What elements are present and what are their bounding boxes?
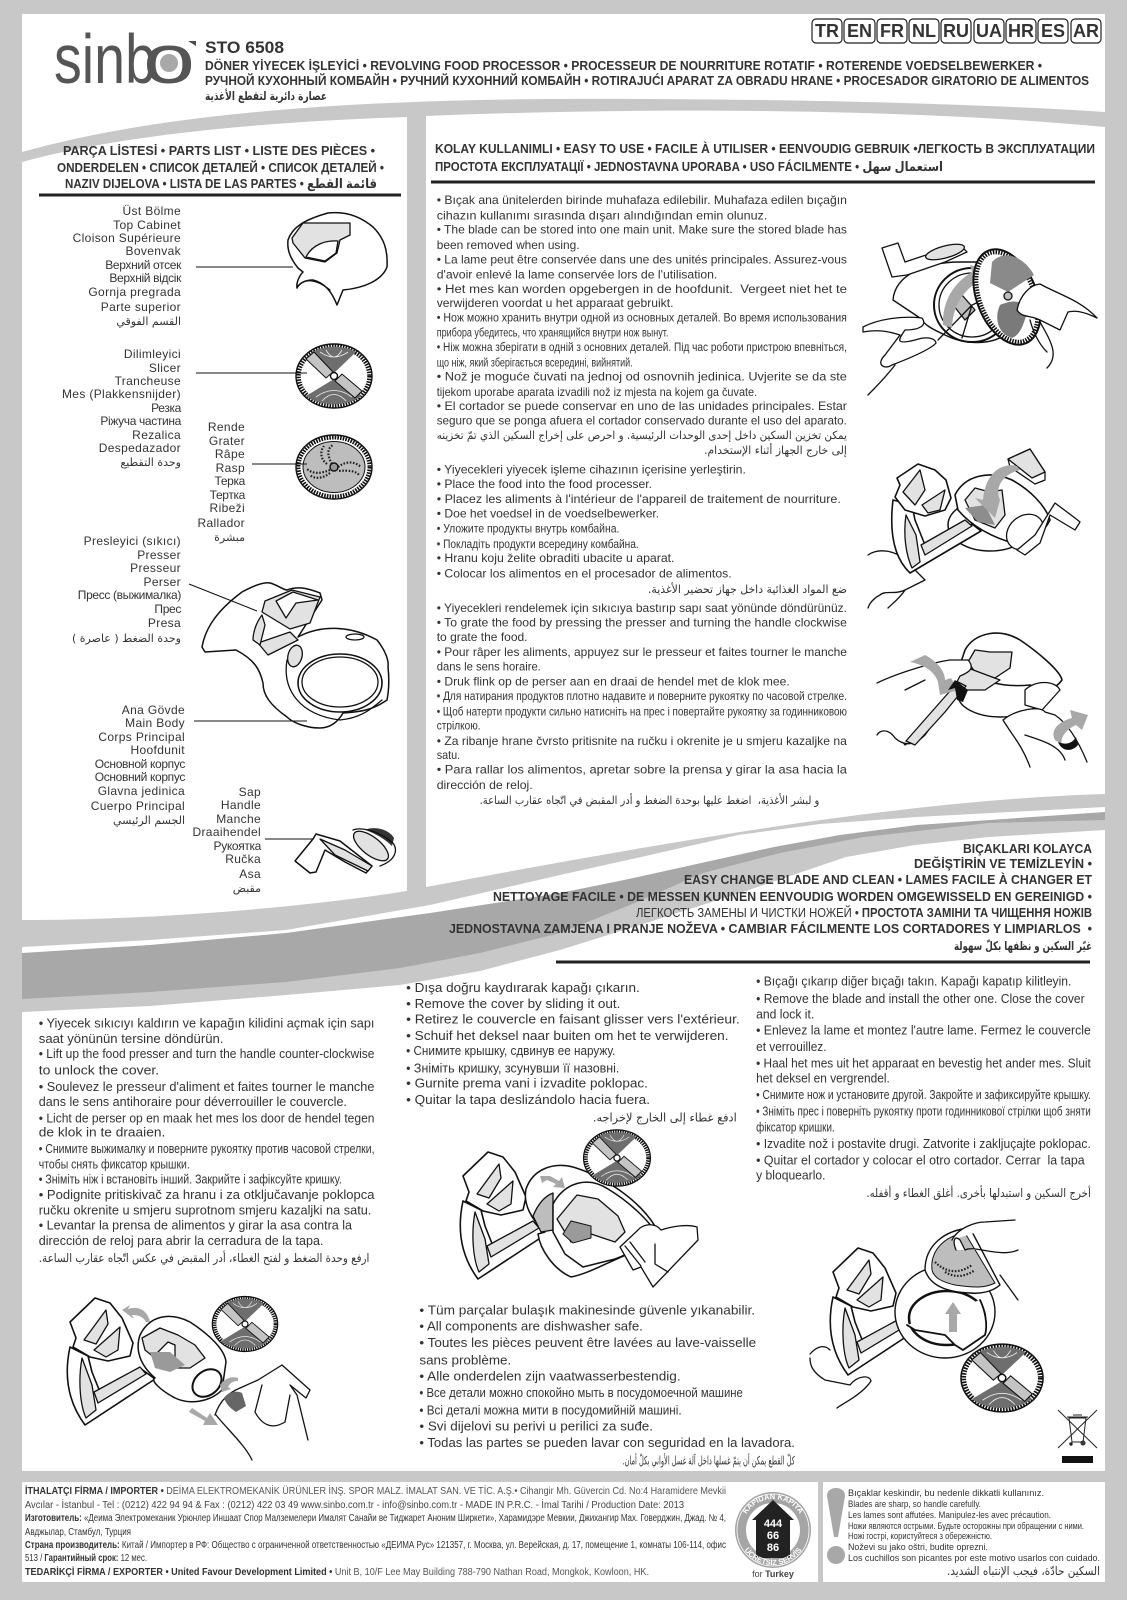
- text block: unlocking cover: ارفع وحدة الضغط و لفتح الغطاء، أدر المقبض في عكس اتّجاه عقارب الساعة.: [39, 1250, 369, 1266]
- label: grater: Ribeži: [210, 501, 245, 515]
- text block: unlocking cover: • Lift up the food presser and turn the handle counter-clockwise: [39, 1046, 374, 1061]
- text block: easy to use instructions: satu.: [437, 748, 460, 762]
- label: handle: Asa: [239, 867, 261, 881]
- text block: importer and exporter details: Изготовитель: «Деима Электромеканик Урюнлер Иншаат Спор Малземелери Ималят Санайи ве Тиджарет Аноним Ширкети», Харамидэре Мевкии, Джихангир Мах. Говерджин, Джад. № 4,: [25, 1513, 726, 1524]
- label: grater: Rende: [208, 420, 245, 434]
- text block: easy to use instructions: been removed when using.: [437, 238, 580, 252]
- text block: easy to use instructions: • Nož je moguće čuvati na jednoj od osnovnih jedinica. Uvjerite se da ste: [437, 370, 847, 384]
- text block: swap blade: het deksel en vergrendel.: [756, 1071, 890, 1086]
- panel: importer footer: [22, 1482, 818, 1582]
- illustration: unlocking and removing handle: [67, 1296, 310, 1460]
- text block: swap blade: • Enlevez la lame et montez l'autre lame. Fermez le couvercle: [756, 1023, 1091, 1038]
- label: grater: Rallador: [198, 516, 245, 530]
- text block: easy to use instructions: • Yiyecekleri rendelemek için sıkıcıya bastırıp sapı saat yönünde döndürünüz.: [437, 601, 847, 615]
- text block: easy to use instructions: • To grate the food by pressing the presser and turning the handle clockwise: [437, 616, 847, 630]
- illustration: installing the other blade: [810, 1220, 1043, 1412]
- illustration: sliding cover off: [460, 1130, 698, 1287]
- badge: free service: 444: [764, 1518, 783, 1530]
- text block: easy to use instructions: to grate the food.: [437, 630, 528, 644]
- text block: easy to use instructions: إلى خارج الجهاز أثناء الإستخدام.: [704, 443, 847, 457]
- label: top cabinet: [73, 204, 182, 328]
- label: main body: Glavna jedinica: [98, 784, 185, 798]
- label: top cabinet: Top Cabinet: [113, 218, 181, 232]
- text block: remove cover: • Retirez le couvercle en faisant glisser vers l'extérieur.: [406, 1011, 740, 1026]
- text block: unlocking cover: • Levantar la prensa de alimentos y girar la asa contra la: [39, 1218, 353, 1233]
- text block: remove cover: • Снимите крышку, сдвинув ее наружу.: [406, 1043, 615, 1058]
- illustration: main body with presser: [189, 583, 389, 728]
- text block: swap blade: • Haal het mes uit het apparaat en bevestig het ander mes. Sluit: [756, 1055, 1091, 1070]
- text block: unlocking cover: saat yönünün tersine döndürün.: [39, 1031, 223, 1046]
- text block: swap blade: et verrouillez.: [756, 1039, 827, 1054]
- text block: easy to use instructions: • Для натирания продуктов плотно надавите и поверните рукоятку по часовой стрелке.: [437, 689, 847, 703]
- language selector boxes: AR: [1073, 21, 1099, 41]
- text block: dishwasher safe: • Svi dijelovi su perivi u perilici za suđe.: [419, 1419, 653, 1434]
- label: presser: Presser: [137, 548, 181, 562]
- label: presser: Presleyici (sıkıcı): [84, 534, 181, 548]
- label: slicer: Despedazador: [99, 441, 181, 455]
- text block: sharp blades warning: Los cuchillos son picantes por este motivo usarlos con cuidado.: [848, 1553, 1100, 1564]
- label: presser: Presseur: [130, 561, 181, 575]
- illustration: pressing and turning: [877, 633, 1088, 767]
- panel: header: [22, 14, 1105, 152]
- text block: easy to use instructions: و لبشر الأغذية، اضغط عليها بوحدة الضغط و أدر المقبض في اتّجاه عقارب الساعة.: [480, 793, 819, 808]
- text block: swap blade: • Quitar el cortador y colocar el otro cortador. Cerrar la tapa: [756, 1152, 1086, 1167]
- text block: dishwasher safe: • Tüm parçalar bulaşık makinesinde güvenle yıkanabilir.: [419, 1302, 755, 1317]
- text block: easy to use instructions: • Colocar los alimentos en el procesador de alimentos.: [437, 567, 732, 581]
- text block: remove cover: • Dışa doğru kaydırarak kapağı çıkarın.: [406, 980, 640, 995]
- text block: easy to use instructions: verwijderen voordat u het apparaat gebruikt.: [437, 296, 673, 310]
- text block: swap blade: • Bıçağı çıkarıp diğer bıçağı takın. Kapağı kapatıp kilitleyin.: [756, 974, 1071, 989]
- label: handle: Draaihendel: [192, 825, 261, 839]
- panel: warning footer: [823, 1482, 1105, 1582]
- icon: exclamation mark: [827, 1488, 845, 1564]
- label: grater: [198, 420, 246, 544]
- text block: easy to use instructions: • Hranu koju želite obraditi ubacite u aparat.: [437, 551, 674, 565]
- title lines: [205, 58, 1089, 103]
- text block: remove cover: • Schuif het deksel naar buiten om het te verwijderen.: [406, 1028, 729, 1043]
- label: main body: Main Body: [125, 716, 185, 730]
- text block: easy to use instructions: ضع المواد الغذائية داخل جهاز تحضير الأغذية.: [648, 582, 847, 596]
- label: grater: Терка: [215, 474, 246, 488]
- text block: sharp blades warning: Noževi su jako oštri, budite oprezni.: [848, 1542, 988, 1553]
- text block: easy to use instructions: прибора убедитесь, что хранящийся внутри нож вынут.: [437, 326, 668, 340]
- icon: crossed-out bin: [1058, 1410, 1097, 1448]
- title lines: عصارة دائرية لتقطع الأغذية: [205, 88, 327, 103]
- label: grater: Rasp: [216, 461, 245, 475]
- heading: easy change blade and clean: NETTOYAGE FACILE • DE MESSEN KUNNEN EENVOUDIG WORDEN OMGEWISSELD EN GEREINIGD •: [493, 889, 1092, 904]
- text block: unlocking cover: чтобы снять фиксатор крышки.: [39, 1156, 190, 1171]
- panel: easy to use: [426, 111, 1105, 887]
- text block: unlocking cover: [39, 1016, 375, 1266]
- heading: easy to use: [431, 141, 1095, 184]
- language selector boxes: HR: [1008, 21, 1034, 41]
- text block: swap blade: фіксатор кришки.: [756, 1120, 835, 1135]
- dark swoosh band: [22, 812, 1105, 999]
- text block: easy to use instructions: • Покладіть продукти всередину комбайна.: [437, 537, 639, 551]
- text block: easy to use instructions: • Уложите продукты внутрь комбайна.: [437, 522, 619, 536]
- text block: easy to use instructions: d'avoir enlevé la lame conservée lors de l'utilisation.: [437, 268, 717, 282]
- text block: unlocking cover: • Soulevez le presseur d'aliment et faites tourner le manche: [39, 1079, 374, 1094]
- text block: remove cover: ادفع غطاء إلى الخارج لإخراجه.: [593, 1110, 737, 1125]
- label: main body: Cuerpo Principal: [91, 799, 185, 813]
- heading: easy change blade and clean: ЛЕГКОСТЬ ЗАМЕНЫ И ЧИСТКИ НОЖЕЙ • ПРОСТОТА ЗАМІНИ ТА ЧИЩЕННЯ НОЖІВ: [636, 905, 1092, 920]
- label: slicer: Slicer: [149, 361, 181, 375]
- label: top cabinet: Üst Bölme: [122, 204, 181, 218]
- text block: sharp blades warning: Les lames sont affutées. Manipulez-les avec précaution.: [848, 1510, 1051, 1521]
- label: slicer: Dilimleyici: [124, 347, 181, 361]
- label: slicer: Резка: [151, 401, 182, 415]
- badge: free service: ÜCRETSİZ SERVİS: [745, 1547, 801, 1566]
- badge: free service: [735, 1492, 811, 1579]
- label: presser: Пресс (выжималка): [78, 588, 181, 602]
- heading: easy to use: ПРОСТОТА ЕКСПЛУАТАЦІЇ • JEDNOSTAVNA UPORABA • USO FÁCILMENTE • استعمال سهل: [435, 159, 943, 174]
- panel: blade change and clean: [22, 830, 1105, 1471]
- badge: free service: KAPIDAN KAPIYA: [742, 1494, 802, 1514]
- language selector boxes: UA: [976, 21, 1002, 41]
- model number: STO 6508: [205, 38, 284, 57]
- label: main body: Основний корпус: [95, 770, 185, 784]
- text block: importer and exporter details: 513 / Гарантийный срок: 12 мес.: [25, 1553, 147, 1564]
- text block: easy to use instructions: • Placez les aliments à l'intérieur de l'appareil de traitement de nourriture.: [437, 492, 841, 506]
- badge: free service: 66: [767, 1530, 779, 1542]
- heading: easy change blade and clean: DEĞİŞTİRİN VE TEMİZLEYİN •: [914, 856, 1092, 871]
- text block: swap blade: أخرج السكين و استبدلها بأخرى. أغلق الغطاء و أقفله.: [866, 1185, 1091, 1201]
- label: presser: Presa: [148, 616, 181, 630]
- text block: remove cover: • Gurnite prema vani i izvadite poklopac.: [406, 1076, 648, 1091]
- text block: easy to use instructions: • Yiyecekleri yiyecek işleme cihazının içerisine yerleştirin.: [437, 462, 746, 476]
- label: main body: Corps Principal: [98, 730, 185, 744]
- text block: swap blade: • Remove the blade and install the other one. Close the cover: [756, 991, 1085, 1006]
- illustration: top cabinet: [196, 213, 387, 305]
- label: top cabinet: Верхній відсік: [109, 271, 182, 285]
- badge: free service: for Turkey: [752, 1569, 794, 1579]
- label: main body: Ana Gövde: [122, 703, 185, 717]
- text block: easy to use instructions: seguro que se ponga afuera el cortador conservado durante el uso del aparato.: [437, 413, 847, 427]
- text block: easy to use instructions: dans le sens horaire.: [437, 659, 541, 673]
- text block: dishwasher safe: • Todas las partes se pueden lavar con seguridad en la lavadora.: [419, 1435, 795, 1450]
- label: handle: Рукоятка: [214, 839, 262, 853]
- text block: easy to use instructions: • Za ribanje hrane čvrsto pritisnite na ručku i okrenite je u smjeru kazaljke na: [437, 734, 847, 748]
- text block: remove cover: • Quitar la tapa deslizándolo hacia fuera.: [406, 1092, 650, 1107]
- heading: parts list: PARÇA LİSTESİ • PARTS LIST • LISTE DES PIÈCES •: [63, 143, 375, 158]
- label: top cabinet: Cloison Supérieure: [73, 231, 181, 245]
- label: grater: Râpe: [215, 447, 245, 461]
- illustration: grater disc: [252, 435, 372, 499]
- text block: unlocking cover: dans le sens antihoraire pour déverrouiller le couvercle.: [39, 1094, 347, 1109]
- heading: easy change blade and clean: EASY CHANGE BLADE AND CLEAN • LAMES FACILE À CHANGER ET: [684, 872, 1092, 887]
- text block: swap blade: y bloquearlo.: [756, 1168, 826, 1183]
- text block: swap blade: and lock it.: [756, 1006, 814, 1021]
- heading: easy change blade and clean: [449, 841, 1093, 964]
- label: handle: Ručka: [225, 852, 261, 866]
- text block: easy to use instructions: • El cortador se puede conservar en uno de las unidades principales. Estar: [437, 399, 847, 413]
- label: handle: Sap: [239, 785, 261, 799]
- text block: importer and exporter details: [25, 1484, 726, 1578]
- label: slicer: وحدة التقطيع: [120, 456, 181, 469]
- illustration: fitting the disc: [863, 239, 1097, 395]
- text block: unlocking cover: • Зніміть ніж і встановіть інший. Закрийте і зафіксуйте кришку.: [39, 1172, 342, 1187]
- text block: remove cover: • Remove the cover by sliding it out.: [406, 996, 620, 1011]
- label: grater: Тертка: [210, 488, 246, 502]
- text block: easy to use instructions: • Het mes kan worden opgebergen in de hoofdunit. Vergeet niet het te: [437, 282, 847, 296]
- panel: white sliver: [22, 807, 1105, 954]
- black bar under bin icon: [1062, 1456, 1093, 1463]
- text block: dishwasher safe: كلّ القطع يمكن أن يتمّ غسلها داخل آلة غسل الأواني بكلّ أمان.: [622, 1452, 795, 1468]
- title lines: DÖNER YİYECEK İŞLEYİCİ • REVOLVING FOOD PROCESSOR • PROCESSEUR DE NOURRITURE ROTATIF • ROTERENDE VOEDSELBEWERKER •: [205, 58, 1042, 73]
- text block: sharp blades warning: Bıçaklar keskindir, bu nedenle dikkatli kullanınız.: [848, 1488, 1044, 1499]
- heading: parts list: [39, 143, 401, 196]
- label: main body: [91, 703, 185, 827]
- panel: parts list: [22, 117, 407, 920]
- label: presser: Прес: [154, 602, 181, 616]
- heading: parts list: NAZIV DIJELOVA • LISTA DE LAS PARTES • قائمة القطع: [65, 176, 377, 191]
- logo: sinbo: sinb: [54, 20, 156, 98]
- text block: easy to use instructions: • La lame peut être conservée dans une des unités principales. Assurez-vous: [437, 252, 847, 266]
- text block: importer and exporter details: İTHALATÇI FİRMA / IMPORTER • DEİMA ELEKTROMEKANİK ÜRÜNLER İNŞ. SPOR MALZ. İMALAT SAN. VE TİC. A.Ş.• Cihangir Mh. Güvercin Cd. No:4 Haramidere Mevkii: [25, 1484, 726, 1497]
- text block: dishwasher safe: [419, 1302, 795, 1468]
- text block: unlocking cover: • Podignite pritiskivač za hranu i za otključavanje poklopca: [39, 1187, 375, 1202]
- label: handle: [192, 785, 262, 895]
- heading: easy change blade and clean: BIÇAKLARI KOLAYCA: [963, 841, 1093, 856]
- text block: swap blade: • Izvadite nož i postavite drugi. Zatvorite i zakljuçajte poklopac.: [756, 1136, 1091, 1151]
- text block: dishwasher safe: • All components are dishwasher safe.: [419, 1319, 643, 1334]
- text block: unlocking cover: ručku okrenite u smjeru suprotnom smjeru kazaljki na satu.: [39, 1202, 371, 1217]
- logo: sinbo: o: [143, 20, 195, 98]
- text block: importer and exporter details: Авджылар, Стамбул, Турция: [25, 1526, 131, 1538]
- text block: easy to use instructions: cihazın kullanımı sırasında dışarı alındığından emin olunuz.: [437, 208, 767, 222]
- text block: importer and exporter details: Страна производитель: Китай / Импортер в РФ: Общество с ограниченной ответственностью «ДЕИМА Рус» 121357, г. Москва, ул. Верейская, д. 17, помещение 1, комнаты 106-114, офис: [25, 1539, 726, 1551]
- heading: parts list: ONDERDELEN • СПИСОК ДЕТАЛЕЙ • СПИСОК ДЕТАЛЕЙ •: [57, 160, 384, 175]
- heading: easy to use: KOLAY KULLANIMLI • EASY TO USE • FACILE À UTILISER • EENVOUDIG GEBRUIK •ЛЕГКОСТЬ В ЭКСПЛУАТАЦИИ: [435, 141, 1095, 156]
- text block: remove cover: [406, 980, 740, 1125]
- label: top cabinet: Bovenvak: [126, 244, 182, 258]
- text block: dishwasher safe: • Всі деталі можна мити в посудомийній машині.: [419, 1402, 682, 1417]
- label: top cabinet: Gornja pregrada: [88, 285, 181, 299]
- text block: easy to use instructions: • Bıçak ana ünitelerden birinde muhafaza edilebilir. Muhafaza edilen bıçağın: [437, 193, 847, 207]
- text block: unlocking cover: • Yiyecek sıkıcıyı kaldırın ve kapağın kilidini açmak için sapı: [39, 1016, 374, 1031]
- text block: dishwasher safe: sans problème.: [419, 1352, 511, 1367]
- language selector boxes: TR: [815, 21, 839, 41]
- text block: easy to use instructions: dirección de reloj.: [437, 778, 533, 792]
- text block: easy to use instructions: що ніж, який зберігається всередині, вийнятий.: [437, 355, 633, 369]
- text block: sharp blades warning: السكين حادّة، فيجب الإنتباه الشديد.: [947, 1564, 1100, 1579]
- badge: free service: 86: [767, 1542, 779, 1554]
- label: handle: مقبض: [233, 882, 261, 895]
- illustration: slicer disc: [196, 344, 372, 408]
- label: slicer: Rezalica: [132, 428, 181, 442]
- label: slicer: [62, 347, 182, 469]
- text block: easy to use instructions: • Ніж можна зберігати в одній з основних деталей. Під час роботи пристрою впевніться,: [437, 340, 847, 354]
- text block: sharp blades warning: Ножі гострі, користуйтеся з обережністю.: [848, 1531, 992, 1542]
- label: grater: Grater: [209, 434, 245, 448]
- text block: unlocking cover: dirección de reloj para abrir la cerradura de la tapa.: [39, 1233, 323, 1248]
- text block: easy to use instructions: [437, 193, 847, 808]
- text block: easy to use instructions: стрілкою.: [437, 719, 481, 733]
- text block: unlocking cover: to unlock the cover.: [39, 1062, 159, 1077]
- text block: importer and exporter details: Avcılar - İstanbul - Tel : (0212) 422 94 94 & Fax : (0212) 422 03 49 www.sinbo.com.tr - info@sinbo.com.tr - MADE IN P.R.C. - İmal Tarihi / Production Date: 2013: [25, 1498, 684, 1511]
- label: main body: Hoofdunit: [130, 743, 185, 757]
- label: top cabinet: Верхний отсек: [105, 258, 182, 272]
- text block: easy to use instructions: • Place the food into the food processer.: [437, 477, 652, 491]
- heading: easy change blade and clean: JEDNOSTAVNA ZAMJENA I PRANJE NOŽEVA • CAMBIAR FÁCILMENTE LOS CORTADORES Y LIMPIARLOS •: [449, 921, 1092, 936]
- text block: dishwasher safe: • Alle onderdelen zijn vaatwasserbestendig.: [419, 1369, 681, 1384]
- text block: dishwasher safe: • Toutes les pièces peuvent être lavées au lave-vaisselle: [419, 1335, 756, 1350]
- label: grater: مبشرة: [214, 531, 245, 544]
- language selector boxes: NL: [912, 21, 936, 41]
- text block: easy to use instructions: • Щоб натерти продукти сильно натисніть на прес і повертайте рукоятку за годинниковою: [437, 704, 847, 718]
- label: main body: الجسم الرئيسي: [113, 814, 185, 827]
- text block: remove cover: • Зніміть кришку, зсунувши її назовні.: [406, 1060, 619, 1075]
- language selector boxes: EN: [847, 21, 872, 41]
- language selector boxes: [812, 19, 1101, 43]
- text block: easy to use instructions: يمكن تخزين السكين داخل إحدى الوحدات الرئيسية. و احرص على إخراج السكين الذي تمّ تخزينه: [437, 429, 847, 443]
- text block: easy to use instructions: tijekom uporabe aparata izvadili nož iz mjesta na kojem ga čuvate.: [437, 385, 757, 399]
- label: handle: Manche: [216, 812, 261, 826]
- label: presser: وحدة الضغط ( عاصرة ): [72, 632, 181, 645]
- language selector boxes: ES: [1041, 21, 1065, 41]
- label: handle: Handle: [221, 798, 261, 812]
- label: slicer: Mes (Plakkensnijder): [62, 387, 181, 401]
- label: slicer: Ріжуча частина: [100, 414, 182, 428]
- text block: sharp blades warning: Blades are sharp, so handle carefully.: [848, 1499, 981, 1510]
- text block: unlocking cover: • Снимите выжималку и поверните рукоятку против часовой стрелки,: [39, 1141, 374, 1156]
- label: presser: Perser: [144, 575, 181, 589]
- language selector boxes: FR: [880, 21, 904, 41]
- illustration: placing food: [868, 449, 1080, 608]
- text block: unlocking cover: de klok in te draaien.: [39, 1125, 165, 1140]
- text block: importer and exporter details: TEDARİKÇİ FİRMA / EXPORTER • United Favour Development Limited • Unit B, 10/F Lee May Building 788-790 Nathan Road, Mongkok, Kowloon, HK.: [25, 1565, 649, 1578]
- text block: unlocking cover: • Licht de perser op en maak het mes los door de hendel tegen: [39, 1110, 374, 1125]
- text block: dishwasher safe: • Все детали можно спокойно мыть в посудомоечной машине: [419, 1385, 743, 1400]
- illustration: handle: [265, 826, 395, 873]
- label: slicer: Trancheuse: [115, 374, 181, 388]
- text block: easy to use instructions: • The blade can be stored into one main unit. Make sure the stored blade has: [437, 223, 847, 237]
- text block: easy to use instructions: • Druk flink op de perser aan en draai de hendel met de klok mee.: [437, 675, 790, 689]
- text block: sharp blades warning: [848, 1488, 1100, 1579]
- text block: easy to use instructions: • Нож можно хранить внутри одной из основных деталей. Во время использования: [437, 310, 847, 324]
- label: presser: [72, 534, 181, 645]
- label: top cabinet: القسم الفوقي: [116, 315, 181, 328]
- text block: easy to use instructions: • Doe het voedsel in de voedselbewerker.: [437, 506, 659, 520]
- language selector boxes: RU: [943, 21, 969, 41]
- text block: easy to use instructions: • Pour râper les aliments, appuyez sur le presseur et faites tourner le manche: [437, 645, 847, 659]
- text block: easy to use instructions: • Para rallar los alimentos, apretar sobre la prensa y girar la asa hacia la: [437, 762, 847, 776]
- text block: swap blade: [756, 974, 1091, 1201]
- label: top cabinet: Parte superior: [101, 300, 181, 314]
- label: main body: Основной корпус: [95, 757, 185, 771]
